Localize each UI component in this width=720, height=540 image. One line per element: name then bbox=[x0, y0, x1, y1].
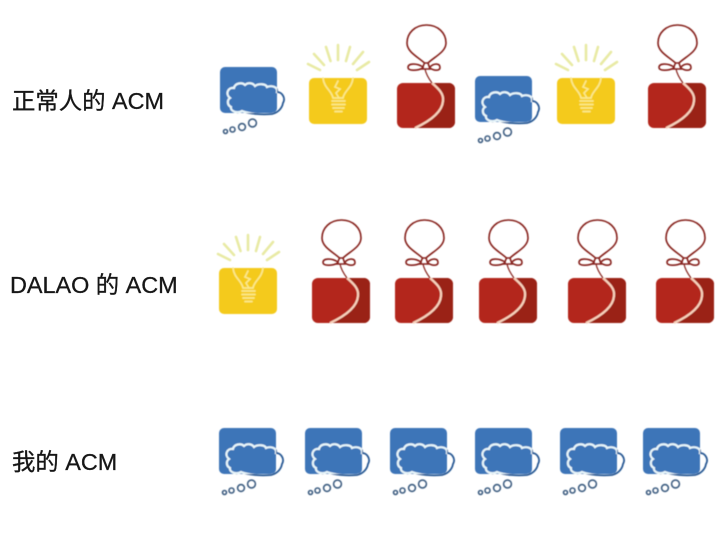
icon: balloon 3 bbox=[479, 220, 537, 323]
row: my ACM bbox=[12, 428, 707, 494]
icon: balloon 1 bbox=[397, 25, 455, 128]
icon: balloon 5 bbox=[656, 220, 714, 323]
icon: thought cloud 3 bbox=[390, 428, 454, 494]
icon: balloon 4 bbox=[568, 220, 626, 323]
label: mine: 我的 ACM bbox=[12, 449, 117, 475]
row: normal person's ACM bbox=[12, 25, 706, 142]
icon: light bulb 2 bbox=[556, 45, 617, 124]
label: DALAO: DALAO 的 ACM bbox=[10, 272, 178, 298]
icon: thought cloud 6 bbox=[643, 428, 707, 494]
icon: thought cloud 2 bbox=[305, 428, 369, 494]
icon: light bulb bbox=[218, 235, 279, 314]
label: normal person: 正常人的 ACM bbox=[12, 88, 164, 114]
icon: balloon 1 bbox=[312, 220, 370, 323]
icon: balloon 2 bbox=[648, 25, 706, 128]
icon: thought cloud 5 bbox=[560, 428, 624, 494]
icon: thought cloud 4 bbox=[475, 428, 539, 494]
icon: thought cloud 1 bbox=[220, 67, 284, 134]
icon: light bulb 1 bbox=[308, 45, 369, 124]
icon: thought cloud 2 bbox=[475, 76, 539, 142]
row: DALAO's ACM bbox=[10, 220, 714, 323]
icon: thought cloud 1 bbox=[219, 428, 283, 494]
icon: balloon 2 bbox=[395, 220, 453, 323]
